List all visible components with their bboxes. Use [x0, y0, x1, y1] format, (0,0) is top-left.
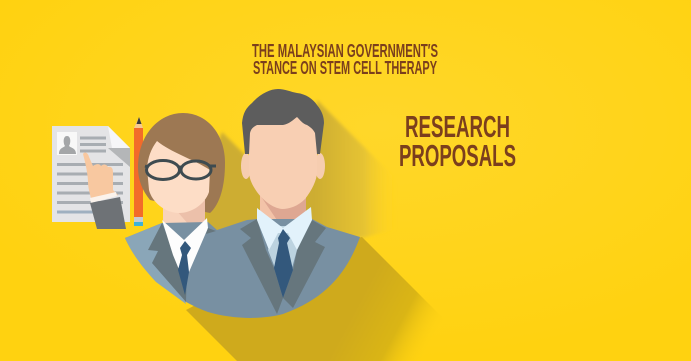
woman collar	[162, 218, 208, 272]
man undershirt	[268, 226, 297, 268]
man hair	[242, 89, 324, 154]
heading: research proposals	[399, 110, 516, 173]
icon: pencil	[134, 117, 143, 226]
man head	[241, 89, 325, 236]
woman head	[138, 113, 225, 242]
man ears	[241, 153, 251, 179]
man tie	[274, 229, 293, 298]
man left lapel	[240, 219, 283, 314]
heading: research proposals: PROPOSALS	[399, 139, 516, 173]
long shadow of the figures	[180, 100, 470, 361]
title	[252, 41, 438, 78]
man collar	[257, 207, 312, 250]
woman right lapel	[206, 228, 216, 234]
heading: research proposals: RESEARCH	[405, 110, 510, 144]
woman face	[147, 141, 210, 213]
woman lapel	[148, 223, 187, 302]
woman left shoulder	[125, 223, 186, 304]
man neck	[260, 190, 306, 236]
icon: pointing hand	[83, 153, 126, 229]
icon: resume document	[52, 126, 130, 222]
woman tie	[178, 241, 191, 295]
woman hair	[138, 113, 225, 213]
icon: glasses	[145, 160, 216, 180]
man face	[249, 112, 317, 209]
man right lapel	[283, 220, 326, 308]
woman neck	[163, 200, 205, 242]
suits	[125, 207, 360, 318]
title: THE MALAYSIAN GOVERNMENT′S	[252, 41, 438, 61]
title: STANCE ON STEM CELL THERAPY	[253, 58, 437, 78]
suit body	[125, 219, 360, 318]
